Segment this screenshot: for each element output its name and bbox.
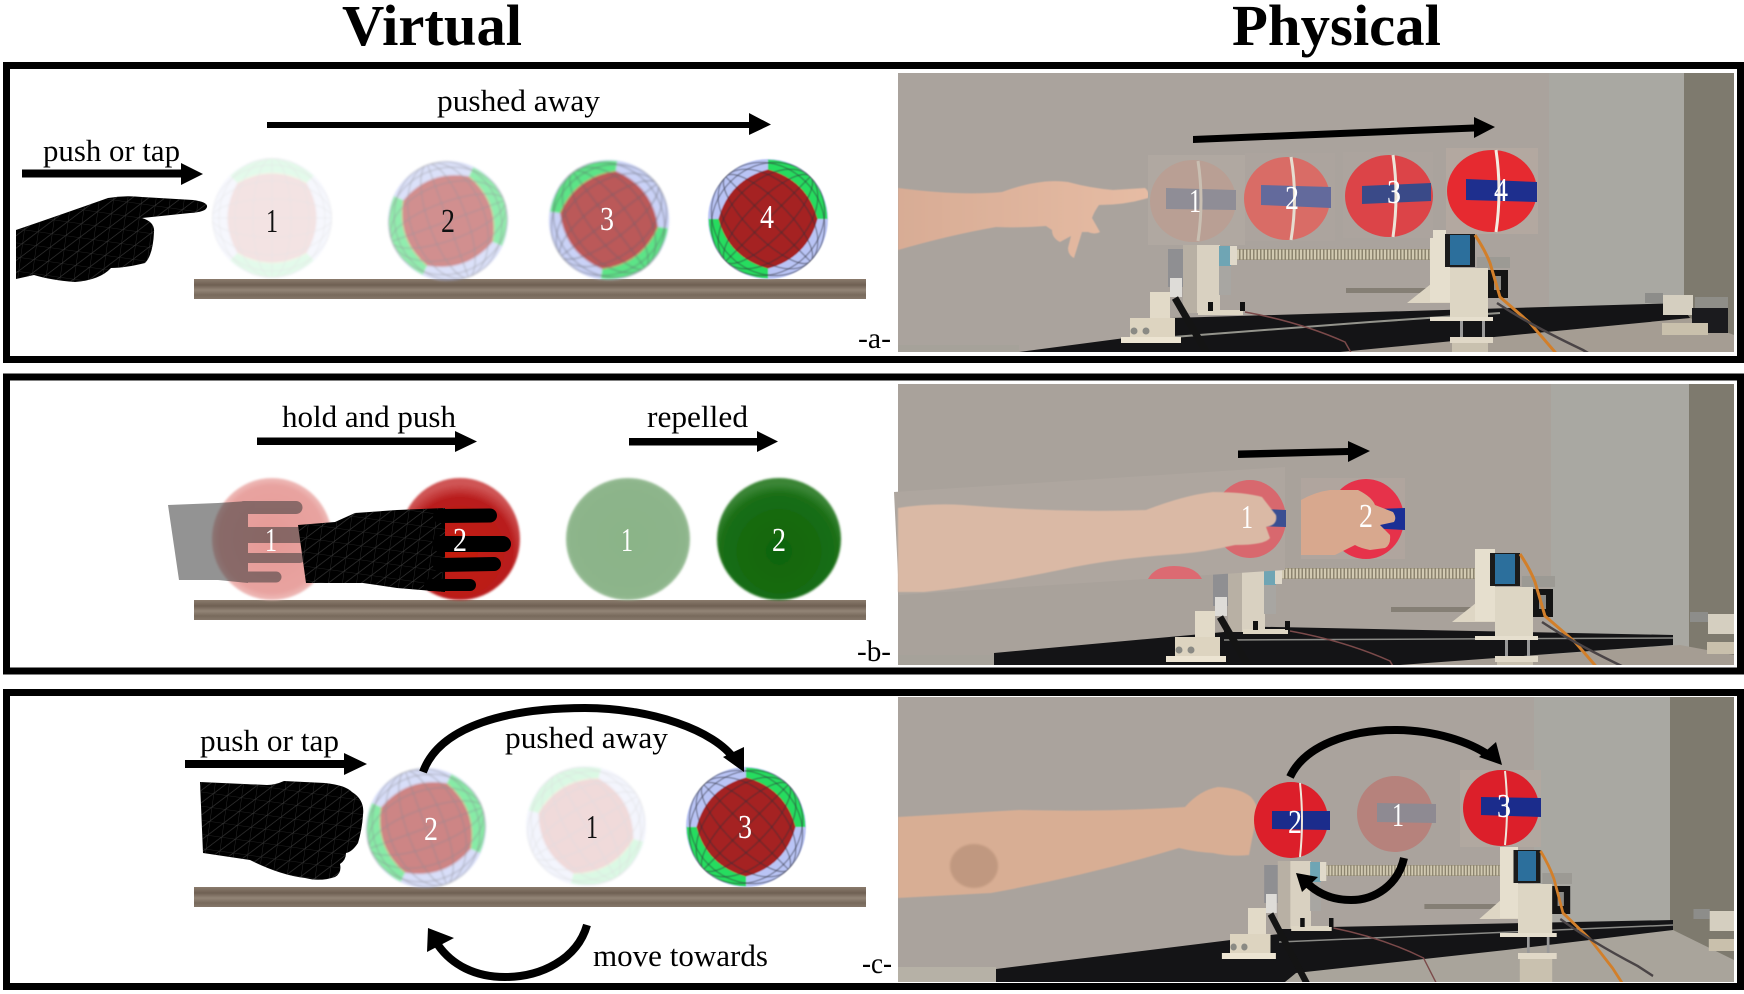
numbers: 1 <box>265 522 277 559</box>
panel c frame <box>6 692 1740 986</box>
photo numbers: 3 <box>1387 174 1401 211</box>
number 3: 3 <box>600 201 614 238</box>
photo curved arrow top <box>1290 730 1502 777</box>
label: pushed away: pushed away <box>505 721 669 755</box>
panel: b <box>6 377 1744 702</box>
green ball 1 <box>566 478 690 600</box>
arrow: pushed away <box>267 113 771 135</box>
black hand <box>298 508 503 592</box>
curved arrow: pushed away <box>423 708 744 772</box>
physical ball 3 <box>1343 152 1433 238</box>
ball 2 <box>371 144 525 298</box>
numbers: 3 <box>738 809 752 846</box>
panel b frame <box>6 377 1740 671</box>
photo numbers: 2 <box>1359 498 1373 535</box>
numbers: 1 <box>621 522 633 559</box>
red ball 1 <box>212 478 332 600</box>
physical ball 2 <box>1254 782 1330 858</box>
number 2: 2 <box>441 203 455 240</box>
ball 2 <box>349 751 503 905</box>
photo arrow b <box>1238 441 1370 462</box>
icon: pointing hand <box>16 196 207 282</box>
numbers: 2 <box>772 522 786 559</box>
photo numbers: 3 <box>1497 788 1511 825</box>
physical ball 4 <box>1446 148 1538 234</box>
tag c: -c- <box>862 947 892 980</box>
photo curved arrow bottom <box>1296 858 1404 900</box>
numbers <box>424 809 752 848</box>
numbers: 1 <box>586 809 598 846</box>
label: repelled: repelled <box>647 400 748 434</box>
label: pushed away: pushed away <box>437 84 601 118</box>
photo numbers: 1 <box>1241 499 1253 536</box>
photo arrow a <box>1193 117 1495 143</box>
icon: fist <box>200 781 363 880</box>
photo numbers: 2 <box>1288 804 1302 841</box>
photo b <box>894 384 1734 665</box>
photo numbers: 4 <box>1494 172 1508 209</box>
elbow shading <box>950 844 998 888</box>
ball 4 <box>683 134 853 304</box>
numbers: 2 <box>424 811 438 848</box>
physical ball 2 with hand <box>1301 478 1405 559</box>
photo numbers: 2 <box>1285 180 1299 217</box>
number 4: 4 <box>760 199 774 236</box>
ghost hand <box>168 501 300 583</box>
green ball 2 <box>717 478 841 600</box>
tag a: -a- <box>858 322 891 355</box>
faded ball and lower fragment <box>1148 480 1286 579</box>
ball 3 <box>661 742 831 912</box>
plank <box>194 887 866 907</box>
arrow: push or tap <box>22 163 203 185</box>
arrow: repelled <box>629 431 778 452</box>
photo a <box>898 73 1734 383</box>
arrow: hold and push <box>257 431 477 452</box>
arm with fist <box>898 787 1257 898</box>
label: push or tap: push or tap <box>43 134 180 168</box>
plank <box>194 600 866 620</box>
photo c <box>898 697 1744 994</box>
physical ball 1 <box>1357 776 1436 852</box>
photo numbers <box>1243 504 1372 528</box>
curved arrow: move towards <box>427 925 587 977</box>
photo numbers <box>1191 179 1508 212</box>
number 1: 1 <box>266 203 278 240</box>
numbers: 2 <box>453 522 467 559</box>
panel: a <box>6 66 1740 383</box>
label: hold and push: hold and push <box>282 400 456 434</box>
arm holding <box>898 492 1276 592</box>
photo numbers: 1 <box>1392 797 1404 834</box>
plank <box>194 279 866 299</box>
physical ball 2 <box>1244 153 1335 241</box>
panel a frame <box>6 66 1740 360</box>
red ball 2 <box>400 478 520 600</box>
ball 3 <box>525 136 693 304</box>
photo numbers: 1 <box>1189 183 1201 220</box>
ball 1 <box>212 158 332 278</box>
ghost photo region <box>894 492 1285 575</box>
arrow: push or tap <box>185 753 367 775</box>
physical ball 3 <box>1460 770 1541 847</box>
panel: c <box>6 692 1744 994</box>
numbers <box>265 522 786 559</box>
label: move towards: move towards <box>593 939 768 973</box>
tag b: -b- <box>857 635 891 668</box>
physical ball 1 <box>1148 160 1236 242</box>
label: push or tap: push or tap <box>200 724 339 758</box>
photo numbers <box>1289 794 1510 833</box>
ball 1 <box>504 744 668 908</box>
arm pointing <box>898 181 1149 258</box>
